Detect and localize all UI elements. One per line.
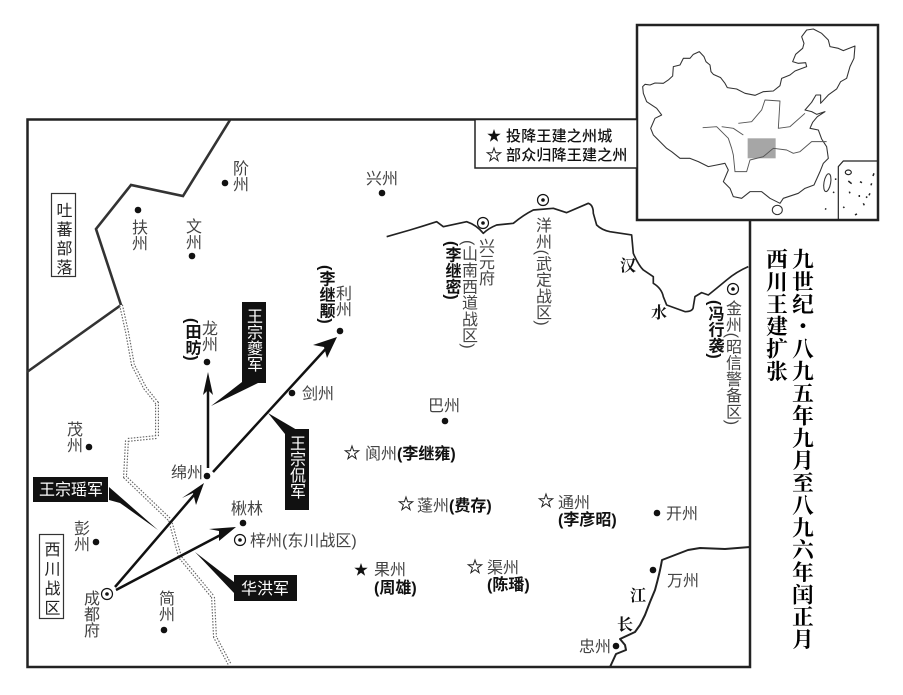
callout: Wang Zongyao army <box>33 477 158 530</box>
town: Wenzhou: 文州 <box>183 218 202 250</box>
inset: rivers <box>703 100 827 172</box>
town: Wenzhou <box>183 218 202 259</box>
town: Maozhou: 茂州 <box>64 421 83 453</box>
callout: Hua Hong army: 华洪军 <box>241 580 289 598</box>
panel: main map frame <box>28 120 750 667</box>
town: Xingyuan: (山南西道战区) <box>459 240 478 349</box>
arrow: Mianzhou to Lizhou <box>213 337 337 472</box>
town: Zizhou: 梓州(东川战区) <box>250 532 357 550</box>
title column: 九世纪・八九五年九月至八九六年闰正月 <box>788 248 818 650</box>
town: Jinzhou <box>706 284 742 425</box>
panel: legend <box>475 120 637 168</box>
callout: Wang Zongkui army: 王宗夔军 <box>244 308 263 372</box>
arrow: Mianzhou to Longzhou <box>203 372 213 468</box>
town: Jianzhou <box>289 385 334 403</box>
town: Xingyuan: (李继密) <box>442 241 462 300</box>
town: Guozhou <box>354 562 417 597</box>
town: Longzhou: (田昉) <box>182 318 200 361</box>
town: Jiezhou: 阶州 <box>230 160 249 192</box>
town: Pengzhou <box>71 520 99 552</box>
subtitle column: 西川王建扩张 <box>762 248 792 382</box>
region boundary: thick border <box>27 120 230 372</box>
town: Quzhou <box>468 559 530 594</box>
town: Guozhou: 果州 <box>374 562 406 579</box>
town: Xingyuan: 兴元府 <box>476 238 495 287</box>
town: Jianzhou: 剑州 <box>302 385 334 403</box>
river label: Han: 汉 <box>620 257 636 275</box>
river: Han river <box>387 203 748 312</box>
callout: Wang Zongkan army <box>268 413 309 510</box>
town: Langzhou: 阆州 <box>365 445 397 463</box>
inset: Taiwan <box>822 173 832 192</box>
town: Xingyuan <box>442 218 495 349</box>
town: Jinzhou: 金州(昭信警备区) <box>723 300 742 425</box>
town: Lizhou <box>316 265 352 334</box>
town: Lizhou: (李继颙) <box>316 265 336 324</box>
arrow: Chengdu to Mianzhou <box>115 483 204 587</box>
legend: hollow star row: 部众归降王建之州 <box>506 146 628 164</box>
callout: Hua Hong army <box>195 552 297 601</box>
town: Jinzhou: (冯行袭) <box>706 300 724 359</box>
panel: inset map of China <box>637 25 878 220</box>
town: Bazhou <box>428 398 460 424</box>
inset: islands <box>825 173 874 215</box>
town: Pengzhou: 彭州 <box>71 520 90 552</box>
town: Xingzhou: 兴州 <box>366 170 398 188</box>
town: Langzhou <box>345 444 456 463</box>
town: Kaizhou: 开州 <box>666 506 698 523</box>
town: Lizhou: 利州 <box>333 285 352 317</box>
town: Longzhou <box>182 318 218 365</box>
inset: Hainan <box>772 205 782 215</box>
town: Pengzhou east: 蓬州 <box>417 497 449 515</box>
town: Tongzhou: 通州 <box>558 494 590 512</box>
label box: Xichuan war zone <box>40 534 64 619</box>
town: Langzhou: (李继雍) <box>397 444 456 463</box>
town: Wanzhou <box>650 567 699 590</box>
legend: solid star row: 投降王建之州城 <box>506 127 612 145</box>
town: Quzhou: 渠州 <box>487 559 519 577</box>
town: Jianzhou south: 简州 <box>156 590 175 622</box>
inset: shaded region <box>748 138 776 158</box>
town: Wanzhou: 万州 <box>667 573 699 590</box>
town: Chengdu: 成都府 <box>81 590 100 639</box>
town: Chengdu <box>81 588 112 639</box>
boundary: dotted line <box>121 305 230 665</box>
town: Jianzhou south <box>156 590 175 633</box>
town: Qiulin <box>231 500 263 526</box>
river label: Shui: 水 <box>651 304 667 322</box>
town: Mianzhou: 绵州 <box>171 464 203 482</box>
town: Fuzhou: 扶州 <box>129 219 148 251</box>
town: Quzhou: (陈璠) <box>487 575 530 594</box>
inset: China outline <box>643 29 855 203</box>
arrow: Chengdu to Zizhou <box>116 527 236 590</box>
label box: Tubo tribes <box>52 194 76 278</box>
town: Tongzhou: (李彦昭) <box>558 510 617 529</box>
town: Zhongzhou: 忠州 <box>579 638 611 656</box>
town: Fuzhou <box>129 207 148 251</box>
town: Maozhou <box>64 421 92 453</box>
inset: South China Sea box <box>838 161 878 220</box>
callout: Wang Zongkan army: 王宗侃军 <box>287 435 306 499</box>
river label: Chang: 长 <box>617 616 633 634</box>
town: Yangzhou: 洋州(武定战区) <box>533 217 552 326</box>
callout: Wang Zongkui army <box>211 302 266 406</box>
town: Bazhou: 巴州 <box>428 398 460 415</box>
town: Tongzhou <box>539 494 617 529</box>
label box: Tubo tribes: 吐蕃部落 <box>54 202 72 278</box>
town: Pengzhou east: (费存) <box>449 497 492 515</box>
town: Qiulin: 楸林 <box>231 500 263 518</box>
town: Jiezhou <box>222 160 249 192</box>
label box: Xichuan war zone: 西川战区 <box>42 541 60 619</box>
river label: Jiang: 江 <box>630 587 646 605</box>
callout: Wang Zongyao army: 王宗瑶军 <box>39 481 103 499</box>
town: Longzhou: 龙州 <box>199 320 218 352</box>
town: Pengzhou east <box>399 497 492 515</box>
river: Yangtze <box>610 547 750 667</box>
town: Guozhou: (周雄) <box>374 578 417 597</box>
town: Xingzhou <box>366 170 398 196</box>
